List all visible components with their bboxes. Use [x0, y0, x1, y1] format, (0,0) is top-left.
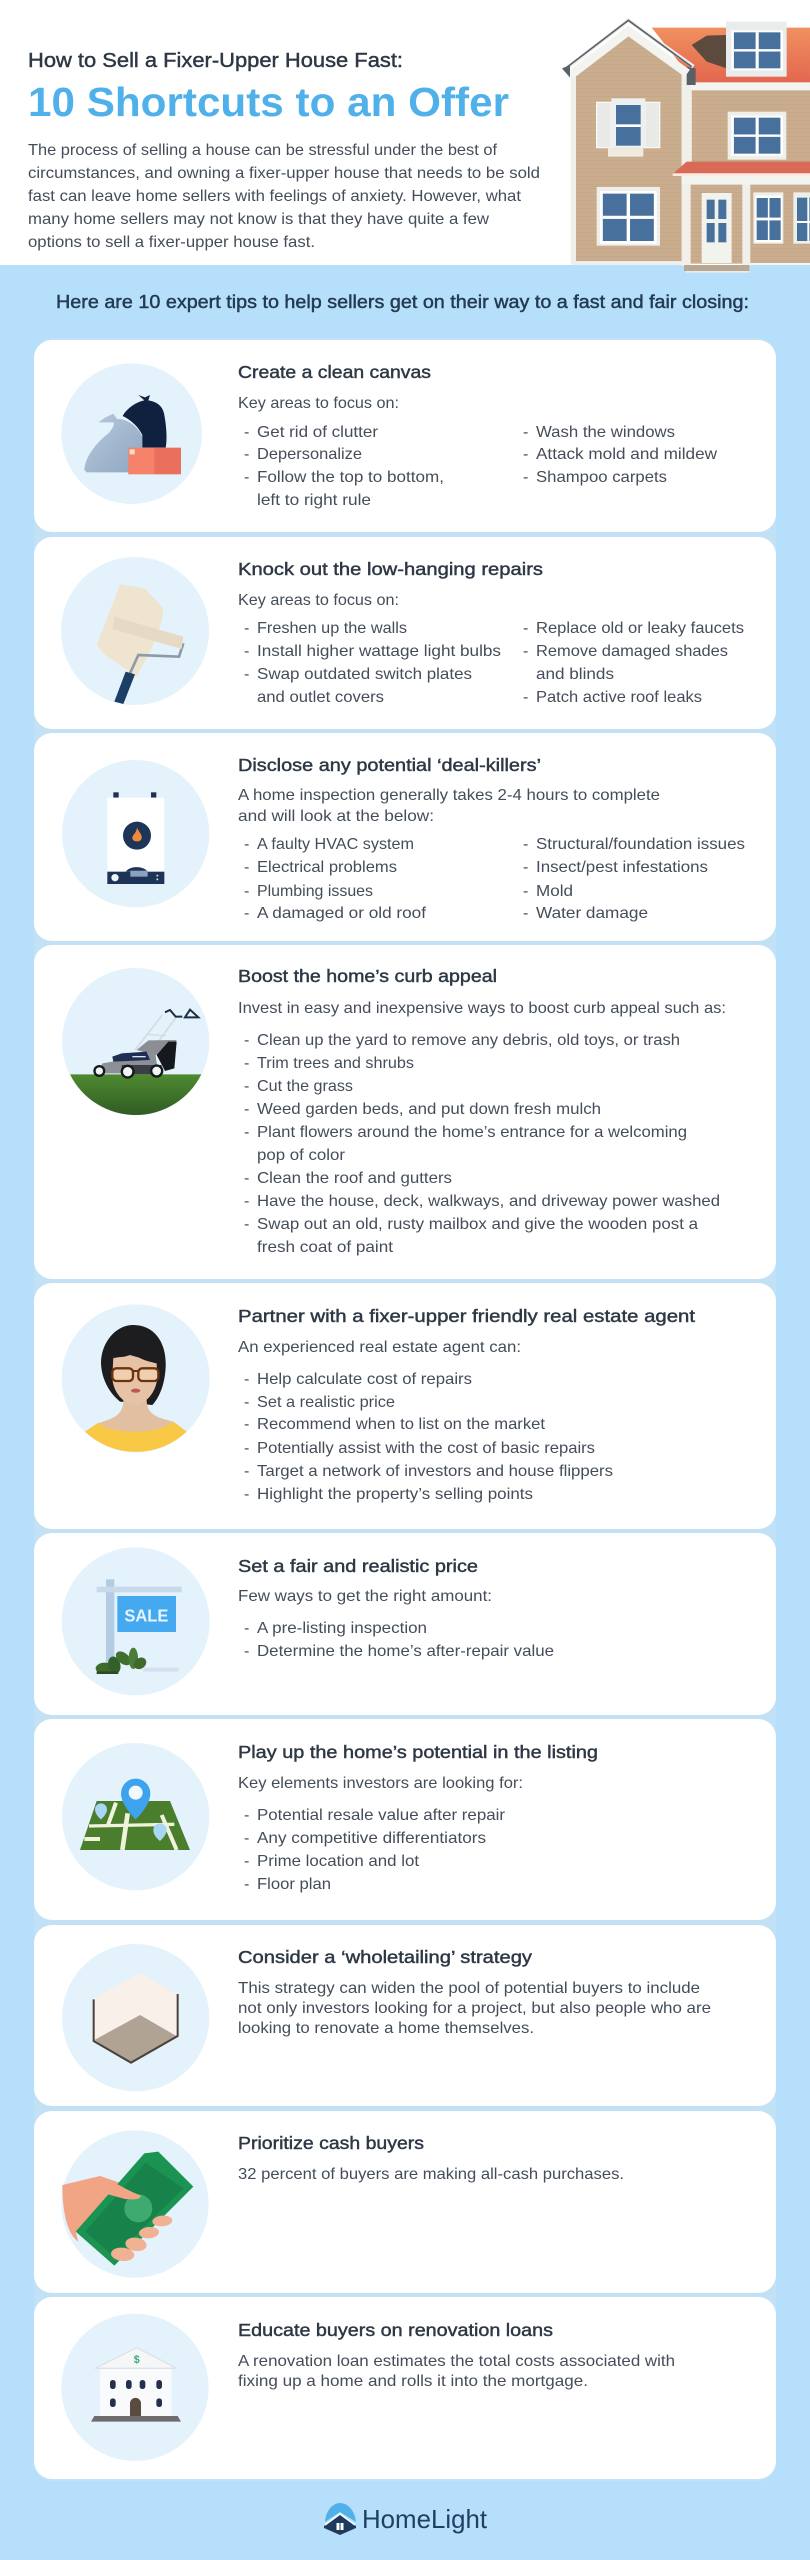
panel: knock out the low-hanging repairs — [34, 537, 776, 729]
heading: Partner with a fixer-upper friendly real estate agent — [238, 1306, 695, 1326]
list: Clean up the yard to remove any debris, old toys, or trash — [257, 1032, 680, 1049]
text: intro: Few ways to get the right amount: — [238, 1588, 492, 1605]
list: - — [244, 1371, 249, 1388]
list: right column — [523, 620, 744, 706]
list: left column: - — [244, 643, 249, 660]
list: right column: - — [523, 643, 528, 660]
text: intro: Key areas to focus on: — [238, 592, 399, 609]
icon: hand with cash — [61, 2130, 209, 2278]
list: - — [244, 1486, 249, 1503]
text: body — [238, 2353, 675, 2390]
list: left column: left to right rule — [257, 492, 371, 509]
list: Target a network of investors and house flippers — [257, 1463, 613, 1480]
list: left column: - — [244, 666, 249, 683]
list: left column: Install higher wattage light bulbs — [257, 643, 501, 660]
list: left column: - — [244, 424, 249, 441]
list: - — [244, 1876, 249, 1893]
list: - — [244, 1830, 249, 1847]
text: body: This strategy can widen the pool of potential buyers to include — [238, 1980, 700, 1997]
list: left column: - — [244, 620, 249, 637]
list: - — [244, 1078, 249, 1095]
list: - — [244, 1463, 249, 1480]
intro paragraph: many home sellers may not know is that they have quite a few — [28, 211, 489, 228]
list: Swap out an old, rusty mailbox and give the wooden post a — [257, 1216, 698, 1233]
list: left column: - — [244, 859, 249, 876]
list: Highlight the property’s selling points — [257, 1486, 533, 1503]
heading: Boost the home’s curb appeal — [238, 966, 497, 986]
list: right column — [523, 424, 717, 486]
list: - — [244, 1416, 249, 1433]
list: right column: Patch active roof leaks — [536, 689, 702, 706]
list: left column: Plumbing issues — [257, 883, 373, 900]
heading: Consider a ‘wholetailing’ strategy — [238, 1947, 532, 1967]
text: intro: Invest in easy and inexpensive ways to boost curb appeal such as: — [238, 1000, 726, 1017]
list: left column: A damaged or old roof — [257, 905, 427, 922]
list: fresh coat of paint — [257, 1239, 394, 1256]
text: intro — [238, 787, 660, 825]
list: Determine the home’s after-repair value — [257, 1643, 554, 1660]
list: right column: Remove damaged shades — [536, 643, 728, 660]
text: intro: An experienced real estate agent can: — [238, 1339, 521, 1356]
panel: renovation loans — [34, 2297, 776, 2479]
heading: Disclose any potential ‘deal-killers’ — [238, 755, 541, 775]
list: - — [244, 1055, 249, 1072]
panel: prioritize cash buyers — [34, 2111, 776, 2293]
list: right column: - — [523, 836, 528, 853]
list: - — [244, 1807, 249, 1824]
list: Set a realistic price — [257, 1394, 395, 1411]
list: Cut the grass — [257, 1078, 353, 1095]
list: left column: - — [244, 469, 249, 486]
list: - — [244, 1193, 249, 1210]
intro paragraph: The process of selling a house can be stressful under the best of — [28, 142, 498, 159]
list: Recommend when to list on the market — [257, 1416, 546, 1433]
list: left column: - — [244, 905, 249, 922]
heading: Play up the home’s potential in the listing — [238, 1742, 598, 1762]
list: right column: - — [523, 424, 528, 441]
list: right column: - — [523, 620, 528, 637]
list: right column: - — [523, 469, 528, 486]
list: right column — [523, 836, 745, 922]
list: - — [244, 1620, 249, 1637]
list: Plant flowers around the home’s entrance for a welcoming — [257, 1124, 687, 1141]
intro paragraph: fast can leave home sellers with feelings of anxiety. However, what — [28, 188, 522, 205]
icon: lawn mower — [62, 968, 209, 1115]
text: body: A renovation loan estimates the total costs associated with — [238, 2353, 675, 2370]
text: intro: and will look at the below: — [238, 808, 434, 825]
text: body: 32 percent of buyers are making all-cash purchases. — [238, 2166, 624, 2183]
text: body: not only investors looking for a project, but also people who are — [238, 2000, 711, 2017]
icon: paint roller — [61, 557, 209, 705]
list: left column: - — [244, 836, 249, 853]
icon: map with pin — [62, 1743, 209, 1890]
intro paragraph: circumstances, and owning a fixer-upper house that needs to be sold — [28, 165, 540, 182]
heading: Create a clean canvas — [238, 362, 431, 382]
text: intro: A home inspection generally takes 2-4 hours to complete — [238, 787, 660, 804]
list: left column: Get rid of clutter — [257, 424, 379, 441]
list: left column: A faulty HVAC system — [257, 836, 414, 853]
list: right column: - — [523, 446, 528, 463]
list: Help calculate cost of repairs — [257, 1371, 472, 1388]
list: A pre-listing inspection — [257, 1620, 427, 1637]
heading: Set a fair and realistic price — [238, 1556, 478, 1576]
list: right column: - — [523, 689, 528, 706]
panel: create a clean canvas — [34, 340, 776, 532]
list: - — [244, 1853, 249, 1870]
list: Prime location and lot — [257, 1853, 420, 1870]
list: pop of color — [257, 1147, 346, 1164]
list: Potentially assist with the cost of basic repairs — [257, 1440, 595, 1457]
logo: HomeLight: HomeLight — [362, 2504, 488, 2534]
list: left column: Follow the top to bottom, — [257, 469, 444, 486]
icon: sale sign: SALE — [124, 1606, 168, 1626]
list: left column — [244, 620, 501, 706]
list: left column: - — [244, 446, 249, 463]
list: - — [244, 1216, 249, 1233]
icon: boiler — [62, 760, 209, 907]
list: left column: and outlet covers — [257, 689, 384, 706]
list — [244, 1620, 554, 1660]
list: Potential resale value after repair — [257, 1807, 506, 1824]
list: - — [244, 1394, 249, 1411]
panel: disclose deal-killers — [34, 733, 776, 941]
list: right column: - — [523, 883, 528, 900]
heading: Educate buyers on renovation loans — [238, 2320, 553, 2340]
heading: Prioritize cash buyers — [238, 2133, 424, 2153]
list: left column: Swap outdated switch plates — [257, 666, 472, 683]
list — [244, 1371, 613, 1503]
list — [244, 1807, 506, 1893]
icon: woman with glasses — [62, 1304, 210, 1452]
heading: supertitle: How to Sell a Fixer-Upper House Fast: — [28, 50, 403, 72]
list: right column: Replace old or leaky faucets — [536, 620, 744, 637]
list: right column: Shampoo carpets — [536, 469, 667, 486]
intro paragraph: options to sell a fixer-upper house fast. — [28, 234, 315, 251]
list: - — [244, 1440, 249, 1457]
heading: main title: 10 Shortcuts to an Offer — [28, 79, 509, 125]
panel: wholetailing — [34, 1925, 776, 2106]
list: Weed garden beds, and put down fresh mulch — [257, 1101, 601, 1118]
list: left column: - — [244, 883, 249, 900]
list: Trim trees and shrubs — [257, 1055, 414, 1072]
list: right column: - — [523, 905, 528, 922]
intro paragraph — [28, 142, 540, 251]
panel: partner with an agent — [34, 1283, 776, 1529]
list: - — [244, 1170, 249, 1187]
list: right column: Attack mold and mildew — [536, 446, 717, 463]
list: - — [244, 1643, 249, 1660]
list: left column — [244, 424, 444, 509]
list: Floor plan — [257, 1876, 331, 1893]
list: left column — [244, 836, 427, 922]
list: - — [244, 1124, 249, 1141]
illustration: house — [562, 20, 810, 273]
icon: empty room — [62, 1944, 209, 2091]
text: intro: Key areas to focus on: — [238, 395, 399, 412]
list: right column: Structural/foundation issues — [536, 836, 745, 853]
list: Have the house, deck, walkways, and driveway power washed — [257, 1193, 720, 1210]
panel: set a fair price — [34, 1533, 776, 1715]
list: left column: Depersonalize — [257, 446, 362, 463]
icon: trash bags and box — [61, 363, 202, 504]
subheading: Here are 10 expert tips to help sellers get on their way to a fast and fair closing: — [56, 291, 749, 312]
panel: boost curb appeal — [34, 945, 776, 1279]
text: intro: Key elements investors are looking for: — [238, 1775, 523, 1792]
list: - — [244, 1101, 249, 1118]
text: body: fixing up a home and rolls it into the mortgage. — [238, 2373, 588, 2390]
list: right column: Wash the windows — [536, 424, 675, 441]
list: right column: Mold — [536, 883, 573, 900]
list: right column: Insect/pest infestations — [536, 859, 708, 876]
list — [244, 1032, 720, 1256]
text: body: looking to renovate a home themselves. — [238, 2020, 534, 2037]
icon: bank — [61, 2314, 209, 2461]
heading: Knock out the low-hanging repairs — [238, 559, 543, 579]
icon: bank: $ — [134, 2354, 140, 2366]
list: right column: and blinds — [536, 666, 614, 683]
list: left column: Electrical problems — [257, 859, 397, 876]
list: Any competitive differentiators — [257, 1830, 486, 1847]
panel: play up potential — [34, 1719, 776, 1920]
text: body — [238, 1980, 711, 2037]
list: Clean the roof and gutters — [257, 1170, 452, 1187]
list: right column: - — [523, 859, 528, 876]
list: - — [244, 1032, 249, 1049]
list: right column: Water damage — [536, 905, 648, 922]
list: left column: Freshen up the walls — [257, 620, 407, 637]
icon: sale sign — [62, 1547, 210, 1695]
